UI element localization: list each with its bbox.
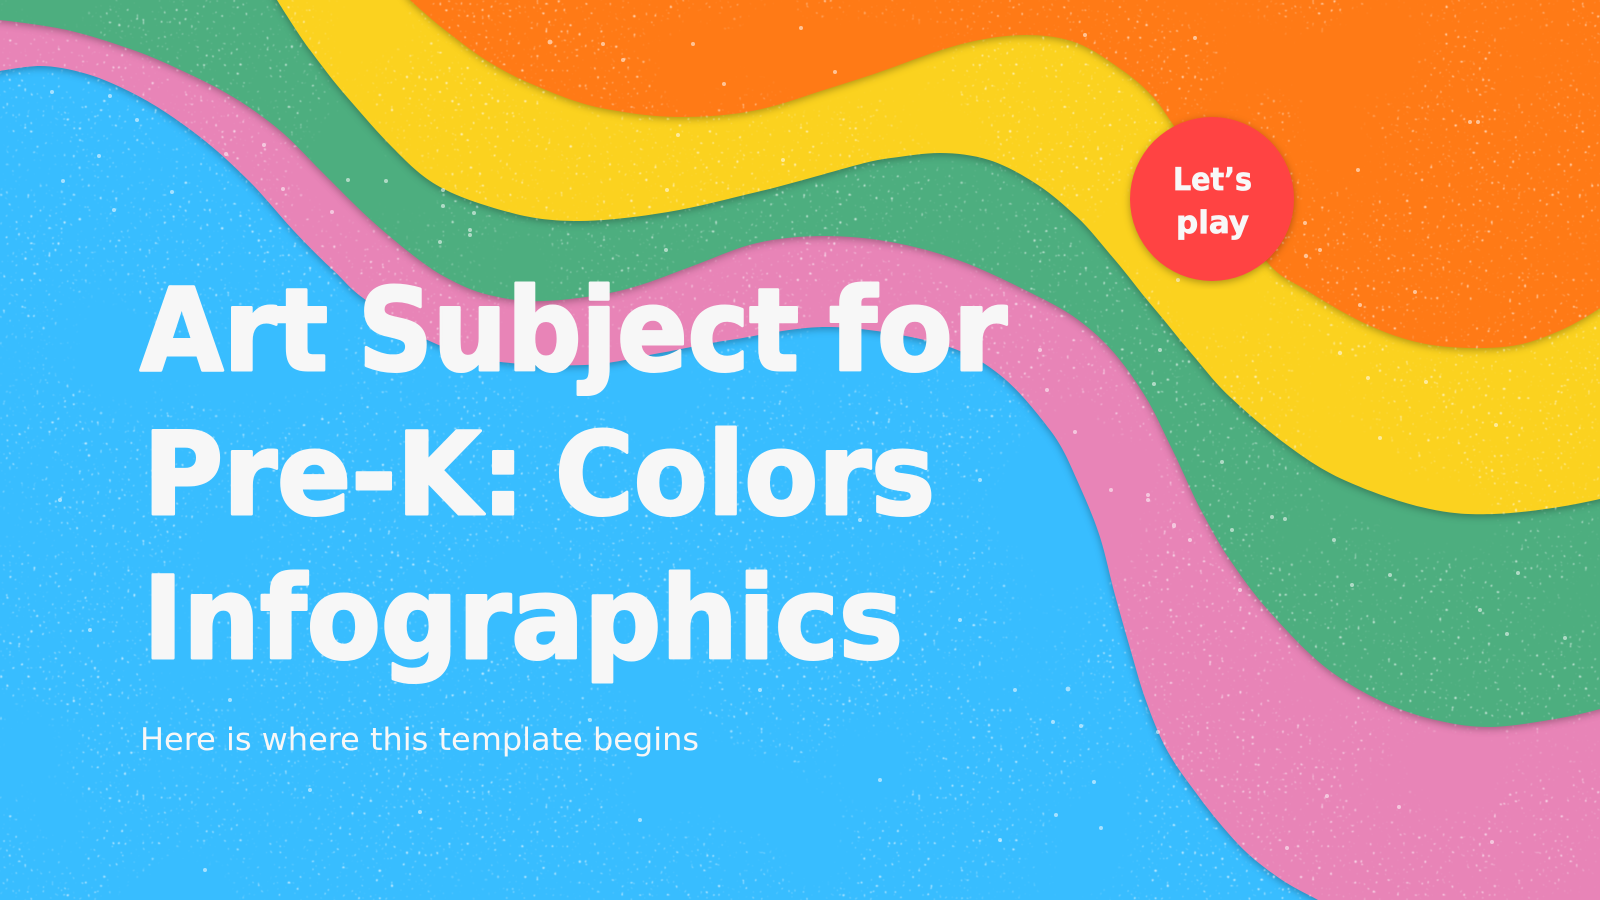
title: Pre-K: <box>143 408 525 541</box>
title: Art <box>140 264 328 397</box>
title: Infographics <box>143 552 903 685</box>
title: Colors <box>555 408 935 541</box>
badge circle <box>1130 117 1294 281</box>
title: Subject <box>358 264 799 397</box>
title <box>140 264 1007 685</box>
subtitle: Here is where this template begins <box>140 722 699 758</box>
title: for <box>829 264 1007 397</box>
wave: orange <box>385 0 1600 348</box>
badge text: Let’s <box>1173 162 1252 198</box>
badge: Let's play <box>1130 117 1294 281</box>
badge text <box>1173 162 1252 241</box>
badge text: play <box>1176 205 1249 241</box>
wave: yellow <box>260 0 1600 514</box>
